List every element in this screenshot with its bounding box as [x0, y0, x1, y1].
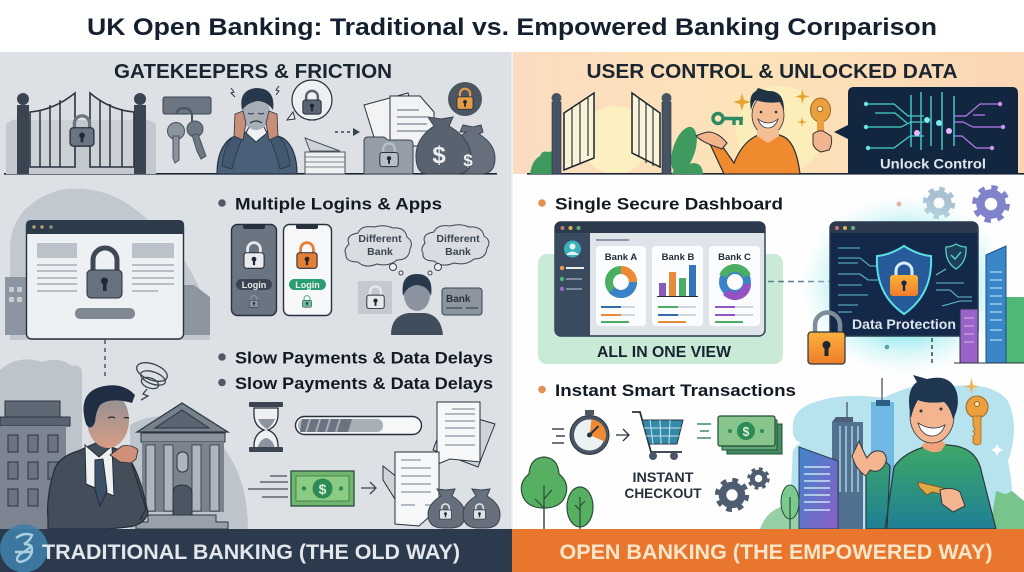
callout: different bank thought clouds: Bank [367, 246, 393, 258]
icon: phone grey: Login [242, 280, 266, 290]
icon: shield with padlock [877, 246, 931, 314]
icon: stopwatch [552, 410, 609, 454]
card: bank a: Bank A [605, 252, 637, 263]
dashboard window [555, 222, 765, 336]
icon: locked gate [6, 93, 156, 174]
icon: small shield check [946, 244, 966, 269]
arrow: stopwatch to cart [616, 429, 629, 441]
icon: phone white: Login [295, 280, 320, 290]
icon: bank card [442, 288, 482, 315]
icon: stressed person [217, 86, 297, 174]
text: multiple logins: Multiple Logins & Apps [235, 194, 442, 214]
icon: smiling man with key [852, 375, 996, 529]
label: instant checkout [624, 470, 702, 501]
icon: documents and folder [364, 93, 434, 174]
card: bank c [709, 246, 760, 326]
icon: gears [896, 188, 1007, 220]
icon: papers and locked bags [383, 452, 500, 528]
text: instant smart transactions: Instant Smart Transactions [555, 381, 796, 400]
icon: bank card: Bank [446, 294, 471, 305]
panel: open banking [513, 52, 1024, 529]
icon: shopping cart [632, 412, 683, 460]
panel: all in one view [538, 254, 783, 364]
icon: hanging orange key [966, 396, 988, 445]
arrow: cash to papers [361, 482, 376, 494]
arrow: dashed to folder [335, 128, 360, 136]
text: slow payments: Slow Payments & Data Delays [235, 348, 493, 368]
icon: phone grey [232, 224, 276, 316]
icon: city towers [885, 246, 1024, 366]
panel: traditional banking [0, 52, 512, 529]
icon: paper stack [305, 138, 345, 174]
text: single secure dashboard: Single Secure Dashboard [555, 194, 783, 214]
card: bank b [652, 246, 703, 326]
icon: confusion scribble [134, 359, 170, 400]
card: bank b: Bank B [662, 252, 695, 263]
icon: worried businessman [48, 385, 148, 529]
text: slow payments: Slow Payments & Data Delays [235, 374, 493, 393]
icon: confused person [391, 274, 443, 335]
footer: open banking: OPEN BANKING (THE EMPOWERED WAY) [560, 541, 992, 564]
label: data protection: Data Protection [852, 316, 956, 332]
icon: lock tile [358, 281, 392, 314]
dashed connector [104, 340, 106, 378]
icon: money stack: $ [743, 425, 750, 439]
data protection window with glow [800, 195, 1010, 375]
icon: paper pile top [428, 402, 495, 467]
panel: all in one view: ALL IN ONE VIEW [597, 344, 731, 361]
icon: money bags [416, 117, 495, 174]
icon: speech bubble with lock [287, 80, 332, 120]
text: slow payments [218, 348, 493, 393]
icon: keys on plate [163, 97, 211, 163]
footer: open banking [512, 529, 1024, 572]
centre divider [512, 52, 513, 529]
top band [513, 52, 1024, 174]
icon: office building and clouds [0, 359, 248, 529]
callout: different bank thought clouds: Different [436, 233, 480, 245]
icon: phone white [284, 224, 332, 316]
callout: different bank thought clouds [345, 225, 489, 275]
label: instant checkout: CHECKOUT [624, 486, 702, 501]
icon: cog pair [717, 469, 768, 510]
icon: trees [521, 457, 593, 529]
icon: happy person with keys [696, 88, 810, 174]
ground line [4, 173, 497, 175]
icon: cash note: $ [319, 481, 327, 497]
label: instant checkout: INSTANT [632, 470, 694, 485]
icon: skyscrapers [781, 378, 894, 529]
card: bank c: Bank C [718, 252, 751, 263]
icon: city scene blob [760, 378, 1024, 529]
icon: open gate [530, 93, 703, 176]
panel: unlock control circuit [834, 87, 1018, 174]
icon: money stack [697, 416, 782, 454]
icon: bank building [136, 403, 228, 529]
icon: locked browser window [5, 189, 210, 340]
icon: cash note [248, 471, 354, 506]
callout: different bank thought clouds: Different [358, 233, 402, 245]
icon: lock badge [448, 82, 482, 116]
dashed connector [768, 280, 830, 282]
footer: traditional banking: TRADITIONAL BANKING (THE OLD WAY) [42, 541, 460, 564]
card: bank a [596, 246, 646, 326]
icon: hourglass [249, 402, 283, 452]
icon: orange key [810, 98, 832, 152]
heading: user control: USER CONTROL & UNLOCKED DATA [586, 61, 958, 83]
icon: money bags: $ [463, 151, 473, 170]
label: unlock control: Unlock Control [880, 156, 986, 172]
chart: progress bar [296, 416, 422, 434]
footer: traditional banking [0, 524, 512, 572]
ground line [527, 173, 1024, 175]
icon: money bags: $ [432, 142, 446, 169]
heading: gatekeepers: GATEKEEPERS & FRICTION [114, 61, 392, 83]
icon: green key [713, 114, 743, 125]
title: UK Open Banking: Traditional vs. Empowered Banking Corıparison [87, 14, 937, 41]
icon: orange padlock [808, 312, 845, 364]
callout: different bank thought clouds: Bank [445, 246, 471, 258]
